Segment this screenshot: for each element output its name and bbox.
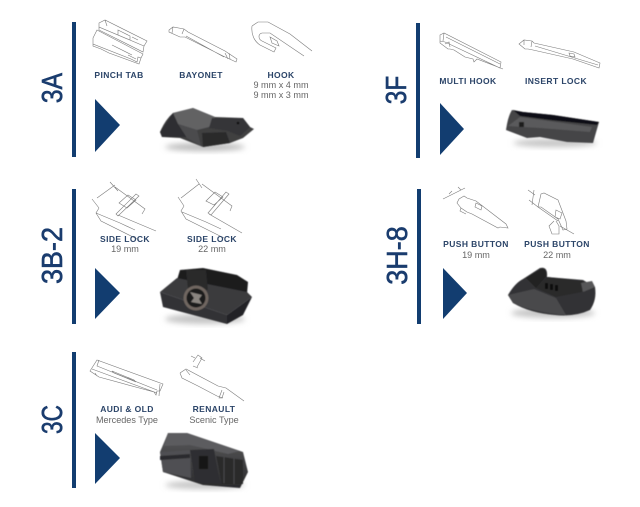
panel: 3H-8 <box>381 187 595 324</box>
icon: bayonet drawing <box>169 27 237 62</box>
photo: 3B-2 adapter <box>160 268 252 324</box>
label: push button 22 mm <box>524 239 590 260</box>
vertical bar <box>72 189 76 324</box>
label: side lock 22 mm <box>187 234 237 254</box>
label: pinch tab: PINCH TAB <box>94 70 144 80</box>
photo: 3F adapter <box>506 110 599 147</box>
icon: pinch tab drawing <box>93 20 147 64</box>
heading: 3C: 3C <box>35 405 69 434</box>
label: side lock 19 mm <box>100 234 150 254</box>
label: push button 19 mm: 19 mm <box>462 250 490 260</box>
arrow marker <box>95 268 120 319</box>
vertical bar <box>417 189 421 324</box>
arrow marker <box>95 433 120 484</box>
icon: push button 22 mm drawing <box>528 190 574 234</box>
label: hook sizes: 9 mm x 4 mm <box>253 80 309 90</box>
photo: 3C adapter <box>160 433 248 489</box>
label: side lock 22 mm: 22 mm <box>198 244 226 254</box>
photo: 3A adapter <box>160 108 254 151</box>
icon: side lock 22 mm drawing <box>178 179 242 238</box>
heading: 3F: 3F <box>380 76 412 104</box>
label: renault scenic type: Scenic Type <box>189 415 239 425</box>
label: audi and old mercedes type: AUDI & OLD <box>100 404 154 414</box>
icon: audi and old mercedes drawing <box>90 360 163 396</box>
panel: 3B-2 <box>36 179 252 324</box>
icon: renault drawing <box>180 355 244 401</box>
heading: 3H-8: 3H-8 <box>381 226 413 285</box>
icon: insert lock drawing <box>519 40 600 68</box>
label: bayonet: BAYONET <box>179 70 223 80</box>
vertical bar <box>72 22 76 157</box>
label: push button 19 mm: PUSH BUTTON <box>443 239 509 249</box>
arrow marker <box>443 268 467 319</box>
label: side lock 19 mm: 19 mm <box>111 244 139 254</box>
icon: side lock 19 mm drawing <box>92 182 156 240</box>
label: audi and old mercedes type: Mercedes Type <box>96 415 158 425</box>
label: hook sizes: HOOK <box>267 70 295 80</box>
label: renault scenic type <box>189 404 239 425</box>
icon: multi hook drawing <box>440 33 503 69</box>
label: hook sizes <box>253 70 309 100</box>
icon: hook drawing <box>252 22 312 56</box>
label: side lock 22 mm: SIDE LOCK <box>187 234 237 244</box>
vertical bar <box>416 23 420 158</box>
panel: 3F <box>380 23 600 158</box>
icon: push button 19 mm drawing <box>443 187 508 228</box>
label: push button 19 mm <box>443 239 509 260</box>
heading: 3A: 3A <box>36 73 68 103</box>
label: multi hook: MULTI HOOK <box>439 76 497 86</box>
photo: 3H-8 adapter <box>508 268 595 318</box>
label: hook sizes: 9 mm x 3 mm <box>253 90 309 100</box>
label: insert lock: INSERT LOCK <box>525 76 587 86</box>
panel: 3A <box>36 20 312 157</box>
arrow marker <box>95 99 120 152</box>
label: push button 22 mm: 22 mm <box>543 250 571 260</box>
label: renault scenic type: RENAULT <box>193 404 236 414</box>
vertical bar <box>72 352 76 488</box>
panel: 3C <box>35 352 248 489</box>
heading: 3B-2: 3B-2 <box>36 227 68 284</box>
label: audi and old mercedes type <box>96 404 158 425</box>
label: side lock 19 mm: SIDE LOCK <box>100 234 150 244</box>
label: push button 22 mm: PUSH BUTTON <box>524 239 590 249</box>
arrow marker <box>440 103 464 155</box>
